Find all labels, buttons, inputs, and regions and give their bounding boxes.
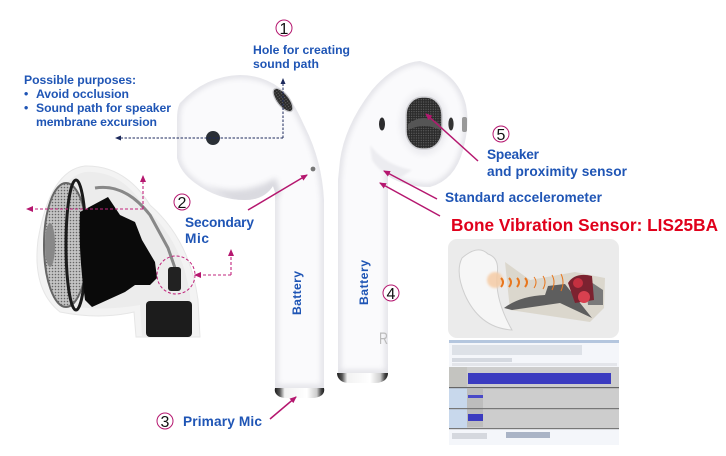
number 2 [174,194,190,212]
label: possible purposes: • [24,87,28,101]
magenta leader arrows [248,114,478,419]
sensor holes [379,118,385,130]
number 3 [157,413,173,431]
secondary mic hole [311,167,315,171]
mic highlight circle [157,256,195,294]
label: possible purposes: membrane excursion [36,115,157,129]
label: speaker and proximity sensor [487,147,628,179]
label: possible purposes: Avoid occlusion [36,87,129,101]
audio software screenshot [449,340,619,445]
heading: bone vibration sensor: Bone Vibration Sensor: LIS25BA [451,215,718,235]
number 1 [276,20,292,38]
R mark: R [379,329,388,348]
label: battery left: Battery [290,271,304,315]
label: battery right: Battery [357,260,371,305]
label: speaker and proximity sensor: and proximity sensor [487,164,628,179]
label: standard accelerometer: Standard accelerometer [445,190,603,205]
label: hole for sound path: sound path [253,57,319,71]
primary mic grille [275,388,324,398]
mesh shell [44,183,88,307]
sound path dashed arrows [116,79,283,138]
label: possible purposes: Possible purposes: [24,73,136,87]
left AirPod [177,75,324,398]
front vent [206,131,220,145]
label: possible purposes [24,73,171,129]
driver [80,197,157,307]
label: primary mic: Primary Mic [183,414,262,429]
number 4: 4 [387,286,396,303]
number 5: 5 [497,127,506,144]
right AirPod [337,61,467,383]
label: possible purposes: Sound path for speaker [36,101,171,115]
speaker mesh [406,97,442,149]
label: secondary mic: Secondary [185,215,254,230]
number 3: 3 [161,414,170,431]
label: hole for sound path [253,43,350,71]
label: secondary mic [185,215,254,246]
number 1: 1 [280,21,289,38]
label: possible purposes: • [24,101,28,115]
number 5 [493,126,509,144]
battery [146,301,192,337]
stem ridge [371,148,410,176]
sound hole [270,85,296,115]
x-ray AirPod image [37,166,200,337]
label: hole for sound path: Hole for creating [253,43,350,57]
number 4 [383,285,399,303]
x-ray dashed arrows [27,176,231,275]
number 2: 2 [178,195,187,212]
label: speaker and proximity sensor: Speaker [487,147,540,162]
mic component [168,267,181,291]
ear anatomy image [448,239,619,338]
label: secondary mic: Mic [185,231,209,246]
bottom grille [337,373,388,383]
